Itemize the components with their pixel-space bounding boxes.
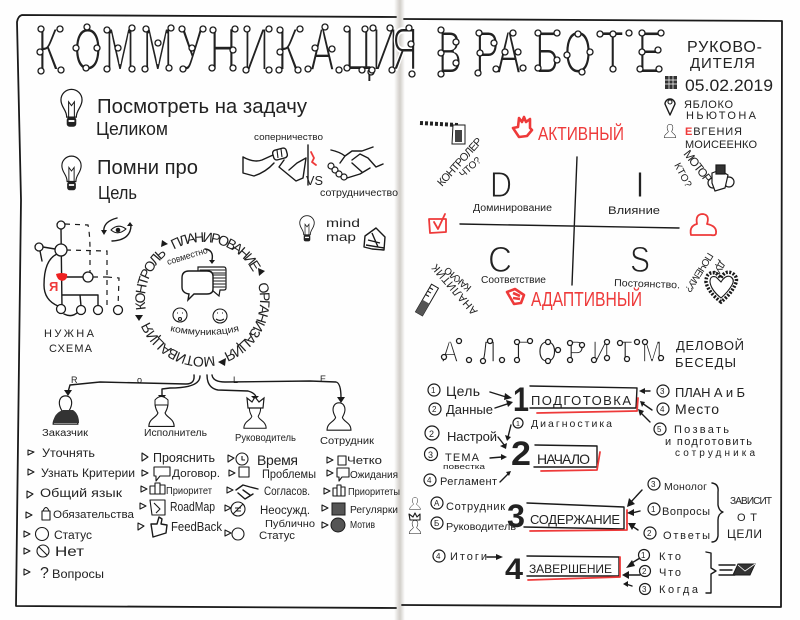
competition vs collaboration: соперничество [254, 132, 323, 142]
role: исполнитель: Исполнитель [144, 428, 207, 439]
tip: remember the goal: Помни про [97, 157, 198, 179]
list: сотрудник: Приоритеты [348, 487, 400, 498]
step 2 inputs: 3 [428, 450, 433, 460]
label: коммуникация: коммуникация [170, 326, 239, 337]
date with calendar icon: 05.02.2019 [685, 76, 773, 95]
quadrant S [614, 239, 680, 291]
title: Коммуникация в работе: ВРАБОТЕ [438, 20, 662, 86]
icon: red person [691, 214, 716, 235]
circle: management cycle: ПЛАНИРОВАНИЕ [170, 232, 261, 272]
list: заказчик: ? [40, 565, 49, 582]
label: контролер что: КОНТРОЛЕР [435, 136, 485, 189]
label: аналитик какую: КАКУЮ [442, 264, 474, 293]
list: руководитель: Статус [259, 530, 296, 542]
role tree arrows R O L E: R [71, 375, 78, 385]
quadrant I: Влияние [608, 205, 660, 217]
list: заказчик: Вопросы [52, 567, 104, 581]
role: заказчик: Заказчик [42, 428, 89, 439]
label: мотор кто: МОТОР [681, 147, 715, 186]
step 3: содержание: 3 [507, 498, 525, 534]
quadrant S: Постоянство. [614, 278, 680, 291]
network diagram: нужна схема [35, 221, 122, 355]
step 3 inputs: Монолог [664, 481, 707, 493]
frame: left page [16, 15, 396, 608]
step 4 inputs: Итоги [450, 551, 487, 563]
subheading: деловой беседы [675, 338, 744, 370]
step 4 inputs [433, 550, 716, 596]
icon: red checkbox [429, 214, 446, 233]
DISC matrix axes [460, 157, 680, 291]
icon: ruler [416, 284, 438, 316]
icon: eye with rotating arrows [101, 218, 133, 241]
subtitle: руководителя: РУКОВО- [687, 39, 762, 56]
icon: spiky heart [706, 272, 736, 302]
title: Коммуникация в работе [37, 17, 664, 86]
step 1 inputs: 5 [657, 425, 662, 434]
list: сотрудник: Мотив [350, 520, 375, 531]
icon: arm wrestling [243, 145, 308, 185]
step 4 inputs: Кто [659, 551, 681, 563]
quadrant C: Соответствие [481, 275, 546, 286]
icon: bulb 1 [61, 89, 82, 127]
subtitle: руководителя [687, 39, 762, 72]
step 2 inputs: повестка [443, 464, 485, 471]
step 3 inputs: А [434, 499, 440, 508]
icon: map [364, 228, 385, 250]
list: руководитель: Неосужд. [260, 505, 310, 517]
network diagram: нужна схема: Я [49, 279, 58, 294]
role tree arrows R O L E: o [137, 375, 142, 385]
label: почему душа: ДУША [704, 258, 727, 287]
author [664, 124, 757, 151]
mind map label: map [326, 230, 356, 244]
list: заказчик: Узнать Критерии [41, 466, 135, 480]
subheading: деловой беседы: ДЕЛОВОЙ [676, 338, 744, 353]
step 1 inputs: 1 [431, 386, 436, 395]
label: почему душа: ПОЧЕМУ? [682, 250, 715, 294]
step 3 inputs: Б [434, 519, 439, 528]
step 1 inputs: 4 [660, 405, 665, 414]
role tree arrows R O L E: L [233, 375, 238, 385]
circle: management cycle [135, 232, 270, 367]
list: сотрудник: Ожидания [350, 470, 398, 481]
step 4 inputs: Что [659, 567, 681, 579]
role: руководитель [235, 397, 296, 444]
subheading: деловой беседы: БЕСЕДЫ [675, 355, 736, 370]
step 3 inputs: Ответы [663, 530, 710, 542]
step 3 inputs: 3 [651, 480, 656, 489]
step 3 inputs: ЗАВИСИТ [730, 496, 772, 507]
list: сотрудник [322, 455, 400, 532]
tip: remember the goal: Цель [98, 183, 137, 203]
icon: red hand [513, 117, 532, 137]
label: адаптивный: АДАПТИВНЫЙ [531, 287, 642, 311]
role tree arrows R O L E: E [320, 374, 326, 384]
tip: look at the task as a whole: Целиком [96, 119, 168, 139]
step 3 inputs: 2 [647, 529, 652, 538]
quadrant D: D [490, 164, 512, 205]
list: заказчик [24, 446, 135, 582]
frame: right page [402, 19, 782, 607]
author: ЕВГЕНИЯ [685, 126, 742, 138]
step 3 inputs [409, 478, 772, 542]
icon: red hand heart [507, 289, 524, 304]
quadrant S: S [630, 239, 650, 280]
list: исполнитель [138, 450, 222, 537]
step 1: подготовка: 1 [513, 381, 529, 419]
step 1 inputs: сотрудника [675, 448, 755, 459]
step 1 inputs: 2 [432, 405, 437, 414]
step 2 inputs [424, 418, 612, 488]
list: исполнитель: Договор. [172, 468, 220, 480]
label: контролер что: ЧТО? [458, 155, 484, 180]
step 3 inputs: Сотрудник [446, 501, 505, 513]
author: МОИСЕЕНКО [685, 139, 757, 151]
step 4: завершение: 4 [505, 553, 523, 586]
list: заказчик: Обязательства [53, 509, 135, 521]
step 2 inputs: Настрой [447, 429, 497, 444]
step 2: начало [511, 435, 600, 473]
location: НЬЮТОНА [686, 110, 757, 122]
step 1 inputs: Позвать [674, 424, 729, 436]
competition vs collaboration: VS [306, 173, 323, 188]
list: руководитель: Время [257, 452, 298, 468]
label: активный: АКТИВНЫЙ [538, 123, 624, 144]
list: заказчик: Нет [55, 543, 85, 559]
role: сотрудник: Сотрудник [320, 435, 374, 447]
step 4 inputs: 3 [642, 585, 647, 594]
label: мотор кто: КТО? [671, 161, 693, 190]
step 1 inputs: Данные [446, 402, 493, 417]
mind map label [326, 216, 360, 244]
list: исполнитель: Приоритет [166, 485, 212, 497]
location [665, 99, 757, 122]
step 1 inputs: Цель [446, 383, 480, 399]
step 3 inputs: 1 [651, 505, 656, 514]
quadrant D: Доминирование [473, 203, 552, 214]
label: совместно: совместно [166, 245, 209, 267]
network diagram: нужна схема: НУЖНА [44, 328, 95, 340]
quadrant C: C [488, 239, 512, 280]
list: исполнитель: Прояснить [153, 450, 215, 465]
role: руководитель: Руководитель [235, 432, 296, 444]
label: аналитик какую: АНАЛИТИК [429, 261, 480, 317]
step 1 inputs [428, 383, 755, 459]
step 4 inputs: 1 [641, 551, 646, 560]
step 4: завершение: ЗАВЕРШЕНИЕ [529, 562, 612, 576]
competition vs collaboration: сотрудничество [320, 188, 398, 199]
circle: management cycle: МОТИВАЦИЯ [141, 322, 214, 367]
icon: faces [173, 308, 227, 323]
icon: handshake [328, 147, 383, 180]
step 1 inputs: Место [675, 401, 719, 417]
step 3 inputs: Руководитель [446, 522, 516, 533]
role: сотрудник [320, 403, 374, 447]
list: исполнитель: FeedBack [171, 519, 222, 534]
step 2: начало: 2 [511, 435, 531, 473]
competition vs collaboration [243, 132, 398, 199]
list: сотрудник: Четко [347, 455, 382, 467]
circle: management cycle: КОНТРОЛЬ [135, 252, 166, 310]
step 2 inputs: 4 [427, 476, 432, 485]
quadrant C [481, 239, 546, 286]
list: руководитель: Проблемы [262, 469, 316, 481]
step 1 inputs: 3 [660, 387, 665, 396]
list: заказчик: Общий язык [40, 486, 123, 500]
step 2 inputs: Регламент [440, 476, 497, 488]
step 4: завершение [505, 553, 620, 586]
step 2 inputs: Диагностика [531, 418, 612, 430]
role tree arrows R O L E [64, 374, 345, 403]
role: заказчик [42, 396, 89, 439]
location: ЯБЛОКО [684, 99, 733, 111]
tip: remember the goal [97, 157, 198, 203]
quadrant I: I [635, 164, 645, 205]
mind map label: mind [326, 216, 360, 230]
icon: bulb mind map [300, 216, 314, 241]
step 4 inputs: 4 [436, 552, 441, 561]
icon: motor gears [708, 165, 734, 191]
list: исполнитель: RoadMap [170, 499, 215, 514]
icon: barrier [420, 123, 465, 144]
circle: management cycle: ОРГАНИЗАЦИЯ [224, 283, 270, 362]
step 1: подготовка [513, 381, 638, 419]
list: заказчик: Уточнять [42, 446, 95, 460]
step 2: начало: НАЧАЛО [537, 451, 590, 467]
step 3 inputs: ЦЕЛИ [727, 527, 762, 541]
list: руководитель [225, 452, 316, 542]
subtitle: руководителя: ДИТЕЛЯ [690, 55, 755, 72]
icon: speech bubbles [182, 267, 226, 300]
step 4 inputs: Когда [659, 584, 699, 596]
icon: bulb 2 [62, 156, 81, 190]
step 2 inputs: ТЕМА [445, 452, 480, 464]
step 1 inputs: и подготовить [665, 436, 752, 448]
icon: red heart node [56, 273, 67, 281]
heading: алгоритм: АЛГОРИТМ [442, 334, 662, 369]
list: руководитель: Согласов. [264, 486, 310, 498]
step 4 inputs: 2 [642, 567, 647, 576]
tip: look at the task as a whole: Посмотреть на задачу [97, 96, 307, 118]
network diagram: нужна схема: СХЕМА [49, 343, 93, 355]
step 3: содержание [507, 498, 627, 534]
list: руководитель: Публично [265, 518, 315, 530]
step 1: подготовка: ПОДГОТОВКА [531, 393, 631, 408]
role: исполнитель [144, 396, 207, 439]
icon: email summary [719, 564, 755, 575]
quadrant I [608, 164, 660, 217]
quadrant D [473, 164, 552, 214]
list: сотрудник: Регулярки [350, 504, 398, 516]
title: Коммуникация в работе: КОММУНИКАЦИЯ [38, 17, 418, 83]
step 3: содержание: СОДЕРЖАНИЕ [530, 512, 620, 527]
list: заказчик: Статус [54, 530, 92, 542]
step 1 inputs: ПЛАН А и Б [675, 385, 745, 400]
step 3 inputs: Вопросы [662, 506, 710, 518]
step 2 inputs: 1 [516, 421, 520, 428]
step 3 inputs: ОТ [737, 512, 757, 524]
step 2 inputs: 2 [429, 429, 434, 439]
tip: look at the task as a whole [96, 96, 307, 139]
